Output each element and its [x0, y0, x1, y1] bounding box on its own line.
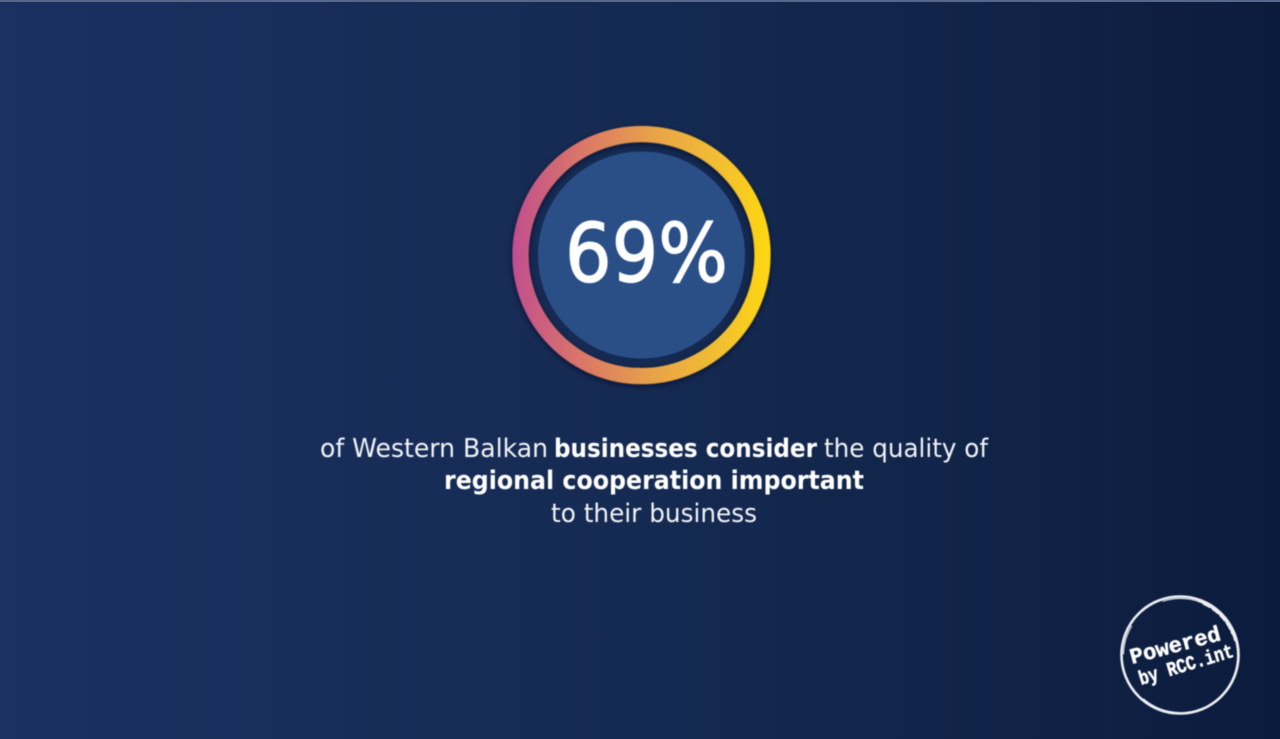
- line 2: regional cooperation important: [444, 466, 864, 496]
- description text: [320, 434, 989, 529]
- top edge line: [0, 0, 1280, 2]
- line 1: [320, 434, 989, 464]
- line 1: the quality of: [824, 434, 989, 464]
- stamp: Powered by RCC.int: [1122, 596, 1238, 714]
- line 1: businesses consider: [554, 434, 817, 464]
- inner disc: [538, 152, 745, 358]
- line 1: of Western Balkan: [320, 434, 548, 464]
- stamp text: Powered: [1127, 623, 1224, 671]
- value: 69%: 69%: [565, 208, 728, 302]
- stamp text: by RCC.int: [1136, 641, 1237, 692]
- line 3: to their business: [551, 499, 757, 529]
- stamp text: [1127, 623, 1237, 692]
- stamp circle: [1122, 596, 1238, 714]
- gradient ring: [520, 134, 762, 376]
- percentage badge: [520, 134, 762, 376]
